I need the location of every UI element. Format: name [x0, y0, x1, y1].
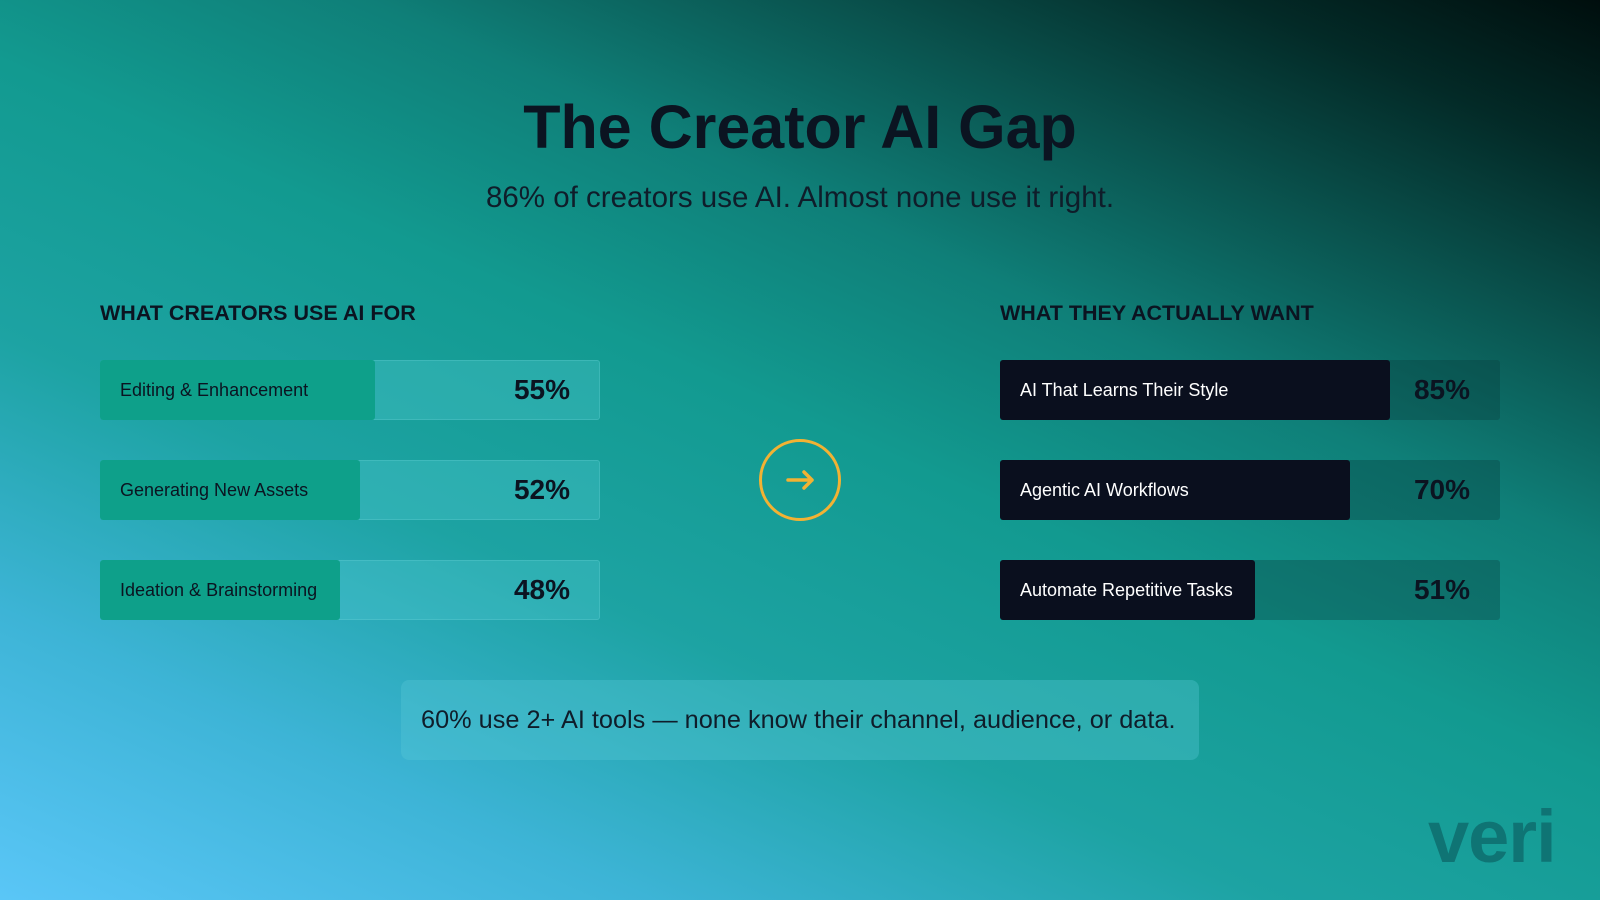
bar: ideation 48%: 48%	[514, 574, 570, 605]
heading: left column: WHAT CREATORS USE AI FOR	[100, 301, 416, 325]
bar: agentic 70%	[1000, 460, 1500, 520]
title: The Creator AI Gap	[523, 93, 1077, 161]
bar: agentic 70%: 70%	[1414, 474, 1470, 505]
bar: generating 52%: Generating New Assets	[120, 480, 308, 500]
callout: bottom note: 60% use 2+ AI tools — none know their channel, audience, or data.	[421, 706, 1176, 734]
callout: bottom note	[401, 680, 1199, 760]
bar: ideation 48%: Ideation & Brainstorming	[120, 580, 317, 600]
panel: wants bars	[1000, 360, 1500, 620]
bar: agentic 70%: Agentic AI Workflows	[1020, 480, 1189, 500]
bar: learns style 85%: 85%	[1414, 374, 1470, 405]
subtitle: 86% of creators use AI. Almost none use it right.	[486, 181, 1114, 214]
bar: learns style 85%: AI That Learns Their Style	[1020, 380, 1228, 400]
bar: ideation 48%	[100, 560, 600, 620]
bar: automate 51%	[1000, 560, 1500, 620]
logo: veri: veri	[1428, 795, 1556, 878]
bar: learns style 85%	[1000, 360, 1500, 420]
heading: right column: WHAT THEY ACTUALLY WANT	[1000, 301, 1314, 325]
bar: editing 55%: Editing & Enhancement	[120, 380, 308, 400]
icon: arrow circle	[759, 439, 841, 521]
bar: automate 51%: Automate Repetitive Tasks	[1020, 580, 1233, 600]
bar: editing 55%	[100, 360, 600, 420]
bar: editing 55%: 55%	[514, 374, 570, 405]
bar: generating 52%	[100, 460, 600, 520]
panel: current uses bars	[100, 360, 600, 620]
bar: generating 52%: 52%	[514, 474, 570, 505]
bar: automate 51%: 51%	[1414, 574, 1470, 605]
